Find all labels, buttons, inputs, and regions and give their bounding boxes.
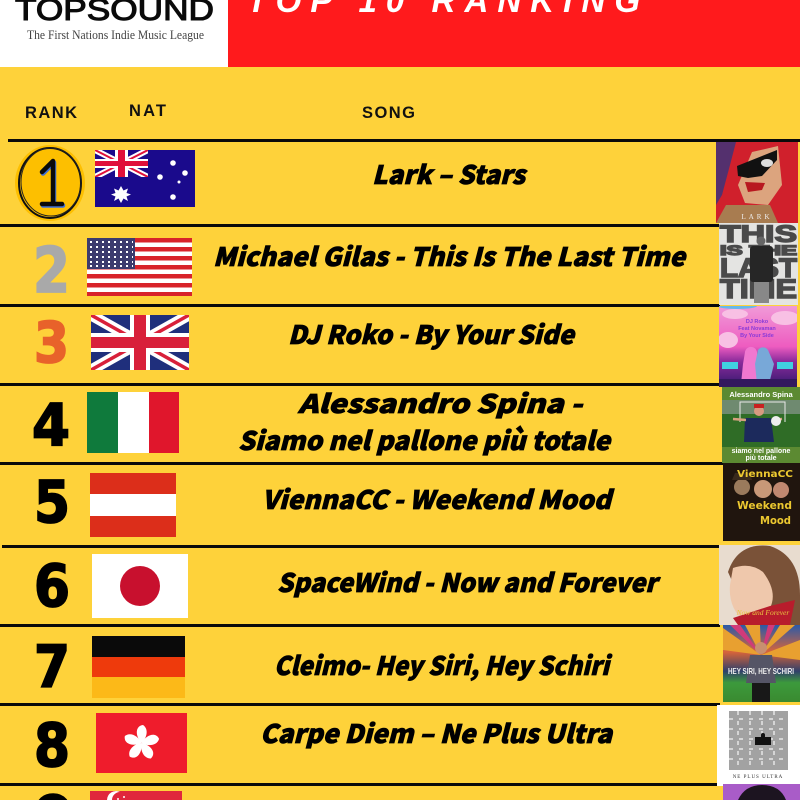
album art: Alessandro Spina: Alessandro Spina [729,390,794,399]
column headings [25,102,415,122]
rank 2: 2 [33,234,70,307]
row 8 [34,705,800,786]
album art: By Your Side: Feat Novaman [738,326,776,332]
row 3 [34,303,799,387]
album art: This Is The Last Time: TIME [720,274,797,304]
flag: United Kingdom [91,315,189,370]
album art: By Your Side: DJ Roko [746,319,769,325]
row 1 [15,142,798,223]
flag: Japan [92,554,188,618]
song title: Siamo nel pallone più totale [238,421,613,458]
album art: Now and Forever: Now and Forever [736,608,789,617]
album art: This Is The Last Time [719,221,798,305]
song title: SpaceWind - Now and Forever [277,563,661,600]
album art: This Is The Last Time: IS THE [720,242,797,258]
album art: Hey Siri [723,625,800,702]
album art: Alessandro Spina [722,387,800,463]
song title: Cleimo- Hey Siri, Hey Schiri [274,646,613,683]
flag: Germany [92,636,185,698]
album art: Now and Forever [719,545,800,625]
song title: Carpe Diem – Ne Plus Ultra [260,714,614,751]
rank 4: 4 [32,391,70,459]
row 5 [34,463,800,541]
header banner [0,0,800,67]
row 2 [33,221,798,307]
album art: By Your Side [717,303,799,387]
flag: Austria [90,473,176,537]
title panel [228,0,800,67]
song title: ViennaCC - Weekend Mood [262,480,615,517]
heading: nat: NAT [129,102,166,120]
album art: Alessandro Spina: più totale [745,455,777,462]
album art: Weekend Mood [723,463,800,541]
heading: song: SONG [362,104,415,122]
flag: Singapore [90,791,182,800]
song title: Alessandro Spina - [297,384,583,421]
album art: rank 9 [723,784,800,800]
album art: By Your Side: By Your Side [740,333,774,339]
album art: Weekend Mood: Mood [760,515,791,527]
album art: This Is The Last Time: LAST [720,253,798,283]
album art: Weekend Mood: Weekend [737,499,792,512]
album art: Alessandro Spina: siamo nel pallone [732,448,790,455]
album art: Weekend Mood: ViennaCC [737,469,793,480]
rank 3: 3 [34,311,69,376]
song title: Michael Gilas - This Is The Last Time [213,237,688,274]
flag: Australia [95,150,195,207]
rank 8: 8 [34,711,70,781]
song title: Lark – Stars [372,155,528,192]
row 6 [34,545,800,625]
flag: Hong Kong [96,713,187,773]
album art: Lark: LARK [741,213,773,221]
flag: Italy [87,392,179,453]
rank 6: 6 [34,552,70,620]
album art: Ne Plus Ultra: NE PLUS ULTRA [733,775,783,780]
row 4 [32,384,800,463]
album art: Ne Plus Ultra [717,705,800,786]
album art: Lark [716,142,798,223]
rank 1 badge [15,145,85,221]
row 9 [90,784,800,800]
song title [238,384,613,458]
rank 7: 7 [34,633,70,701]
heading: rank: RANK [25,104,77,122]
flag: United States [87,238,192,296]
album art: This Is The Last Time: THIS [720,221,797,248]
row 7 [34,625,800,702]
rank 5: 5 [34,468,70,536]
logo panel [0,0,228,67]
song title: DJ Roko - By Your Side [288,315,577,352]
logo tagline: The First Nations Indie Music League [27,28,204,42]
